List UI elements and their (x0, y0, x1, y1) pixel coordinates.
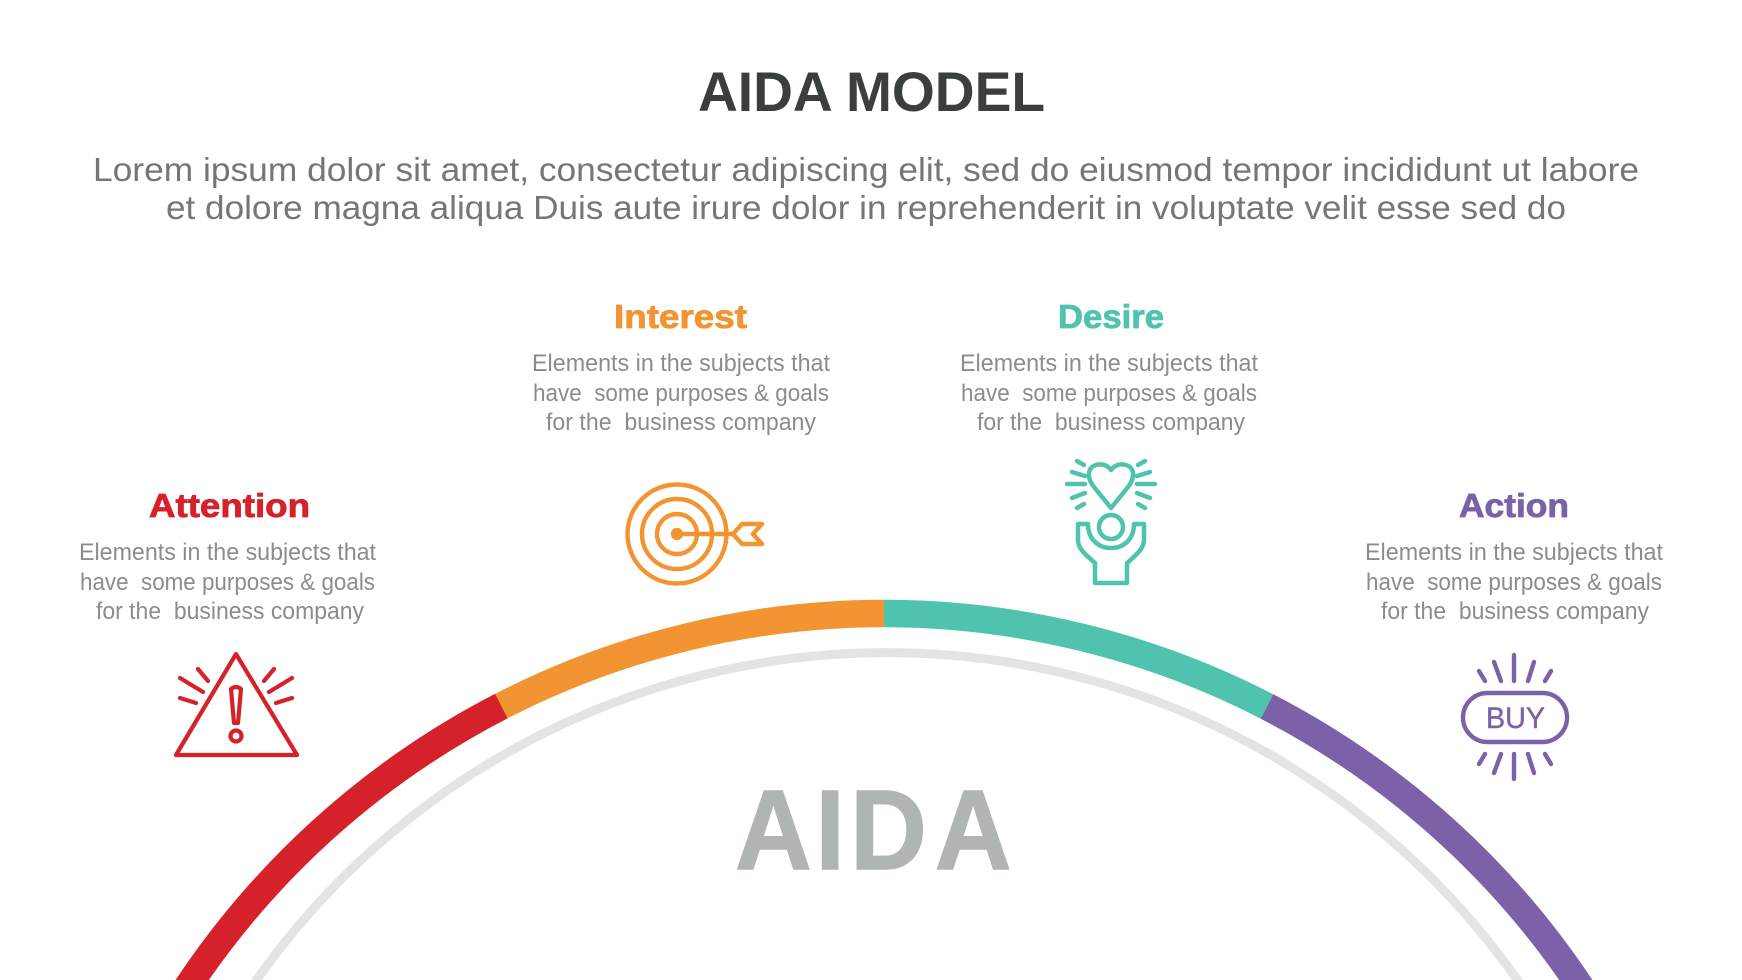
description: action (1365, 539, 1663, 625)
subtitle text block: Lorem ipsum dolor sit amet, consectetur adipiscing elit, sed do eiusmod tempor incididunt ut labore (93, 151, 1639, 188)
subtitle text block (93, 151, 1639, 226)
description: attention: Elements in the subjects that (79, 539, 376, 566)
title: AIDA MODEL (698, 60, 1045, 123)
description: desire: Elements in the subjects that (960, 350, 1258, 377)
heading: action: Action (1459, 487, 1569, 524)
arc segment: interest (502, 614, 884, 706)
icon: person holding heart (1067, 461, 1155, 583)
description: attention: have some purposes & goals (80, 569, 375, 596)
description: interest: for the business company (546, 409, 817, 436)
icon: target with arrow (628, 484, 762, 584)
description: interest (532, 350, 830, 436)
icon: warning triangle (176, 654, 297, 755)
heading: desire: Desire (1058, 298, 1164, 335)
arc segment: attention (179, 706, 502, 980)
heading: interest: Interest (614, 298, 747, 335)
centre label AIDA: AIDA (735, 768, 1011, 894)
panel: action (1365, 487, 1663, 779)
arc segment: desire (884, 614, 1267, 706)
description: action: have some purposes & goals (1366, 569, 1662, 596)
description: action: for the business company (1381, 598, 1650, 625)
icon: buy button: BUY (1486, 702, 1545, 735)
inner grey arc (243, 653, 1531, 980)
arc segment: action (1267, 706, 1589, 980)
description: attention (79, 539, 376, 625)
panel: desire (960, 298, 1258, 583)
panel: attention (79, 487, 376, 755)
description: interest: Elements in the subjects that (532, 350, 830, 377)
subtitle text block: et dolore magna aliqua Duis aute irure dolor in reprehenderit in voluptate velit esse sed do (166, 189, 1566, 226)
description: desire: have some purposes & goals (961, 380, 1257, 407)
heading: attention: Attention (149, 487, 310, 524)
panel: interest (532, 298, 830, 584)
description: attention: for the business company (96, 598, 365, 625)
description: interest: have some purposes & goals (533, 380, 829, 407)
description: action: Elements in the subjects that (1365, 539, 1663, 566)
panel: semicircle arc chart (179, 614, 1589, 980)
icon: buy button (1463, 655, 1567, 779)
description: desire (960, 350, 1258, 436)
description: desire: for the business company (977, 409, 1246, 436)
